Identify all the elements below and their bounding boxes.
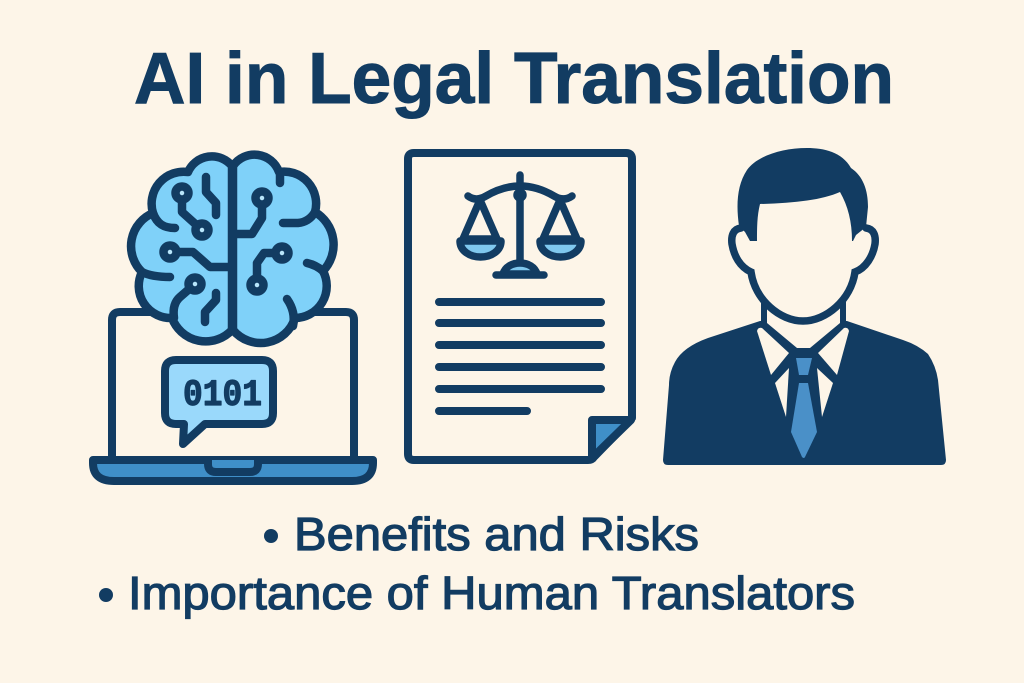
speech bubble with binary bbox=[165, 360, 273, 444]
brain left hemisphere bbox=[131, 156, 232, 341]
face fill bbox=[736, 228, 872, 321]
circuit nodes bbox=[176, 186, 188, 200]
speech bubble with binary: 0101 bbox=[183, 375, 262, 417]
left shirt front bbox=[775, 368, 789, 417]
right collar bbox=[818, 328, 849, 375]
tie bbox=[791, 383, 817, 458]
face and ear outlines bbox=[732, 228, 875, 321]
right shirt front bbox=[817, 368, 833, 417]
bullet: importance of human translators: Importance of Human Translators bbox=[128, 567, 855, 619]
hair bbox=[738, 148, 868, 241]
icon: legal document with scales bbox=[408, 153, 632, 460]
right circuit traces bbox=[233, 198, 262, 234]
icon: laptop with AI brain bbox=[93, 155, 373, 481]
scales of justice bbox=[460, 175, 581, 275]
laptop base bbox=[93, 460, 373, 481]
bullet: benefits and risks: Benefits and Risks bbox=[294, 508, 699, 560]
shirt neck bbox=[767, 300, 840, 348]
bullet list bbox=[99, 508, 855, 619]
laptop screen bbox=[112, 312, 354, 458]
tie knot bbox=[796, 358, 812, 375]
neck lines bbox=[764, 300, 843, 322]
title: AI in Legal Translation bbox=[134, 39, 894, 119]
icon: human translator bbox=[663, 148, 946, 465]
folded corner bbox=[592, 420, 631, 458]
laptop notch bbox=[208, 460, 258, 472]
document sheet bbox=[408, 153, 632, 460]
brain right hemisphere bbox=[233, 155, 334, 343]
left collar bbox=[757, 328, 789, 375]
left circuit traces bbox=[182, 200, 202, 230]
text lines bbox=[439, 302, 601, 411]
brain bbox=[131, 155, 334, 343]
suit bbox=[663, 321, 946, 465]
